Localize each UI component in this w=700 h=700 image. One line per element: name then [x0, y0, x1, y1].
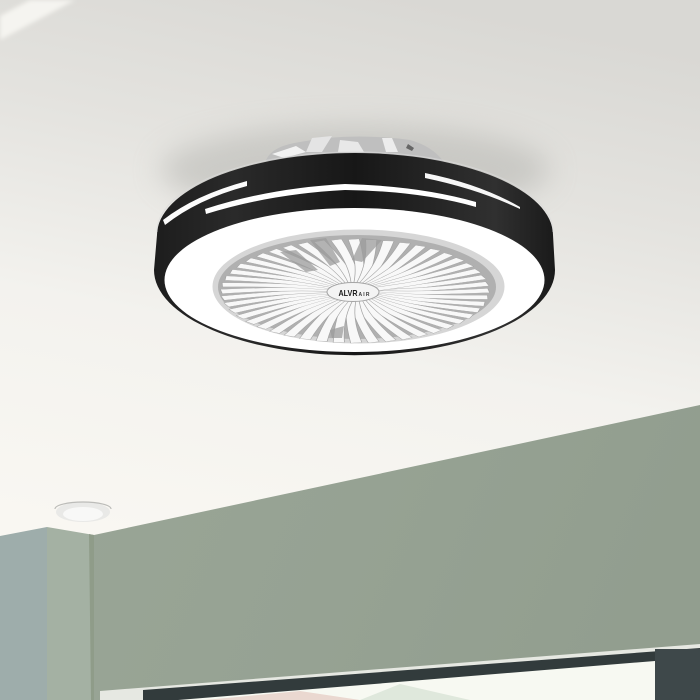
- right light slot: [425, 173, 520, 209]
- fan grille: [212, 230, 504, 344]
- ceiling shadow around fan: [160, 125, 550, 215]
- wall: [0, 405, 700, 700]
- ceiling sensor: [55, 502, 111, 522]
- hub logo: AIR: [358, 292, 370, 298]
- ceiling: [0, 0, 700, 560]
- black housing side: [154, 152, 555, 355]
- window: [100, 644, 700, 700]
- light diffuser ring: [164, 208, 544, 352]
- hub logo: [327, 282, 379, 302]
- ceiling fan: [154, 136, 555, 355]
- hub logo: ALVR: [338, 288, 358, 298]
- motor seen through blades: [280, 238, 382, 338]
- left light slot: [163, 181, 247, 225]
- long light slot: [205, 184, 476, 214]
- motor housing: [266, 136, 444, 172]
- fan blades: [218, 238, 492, 344]
